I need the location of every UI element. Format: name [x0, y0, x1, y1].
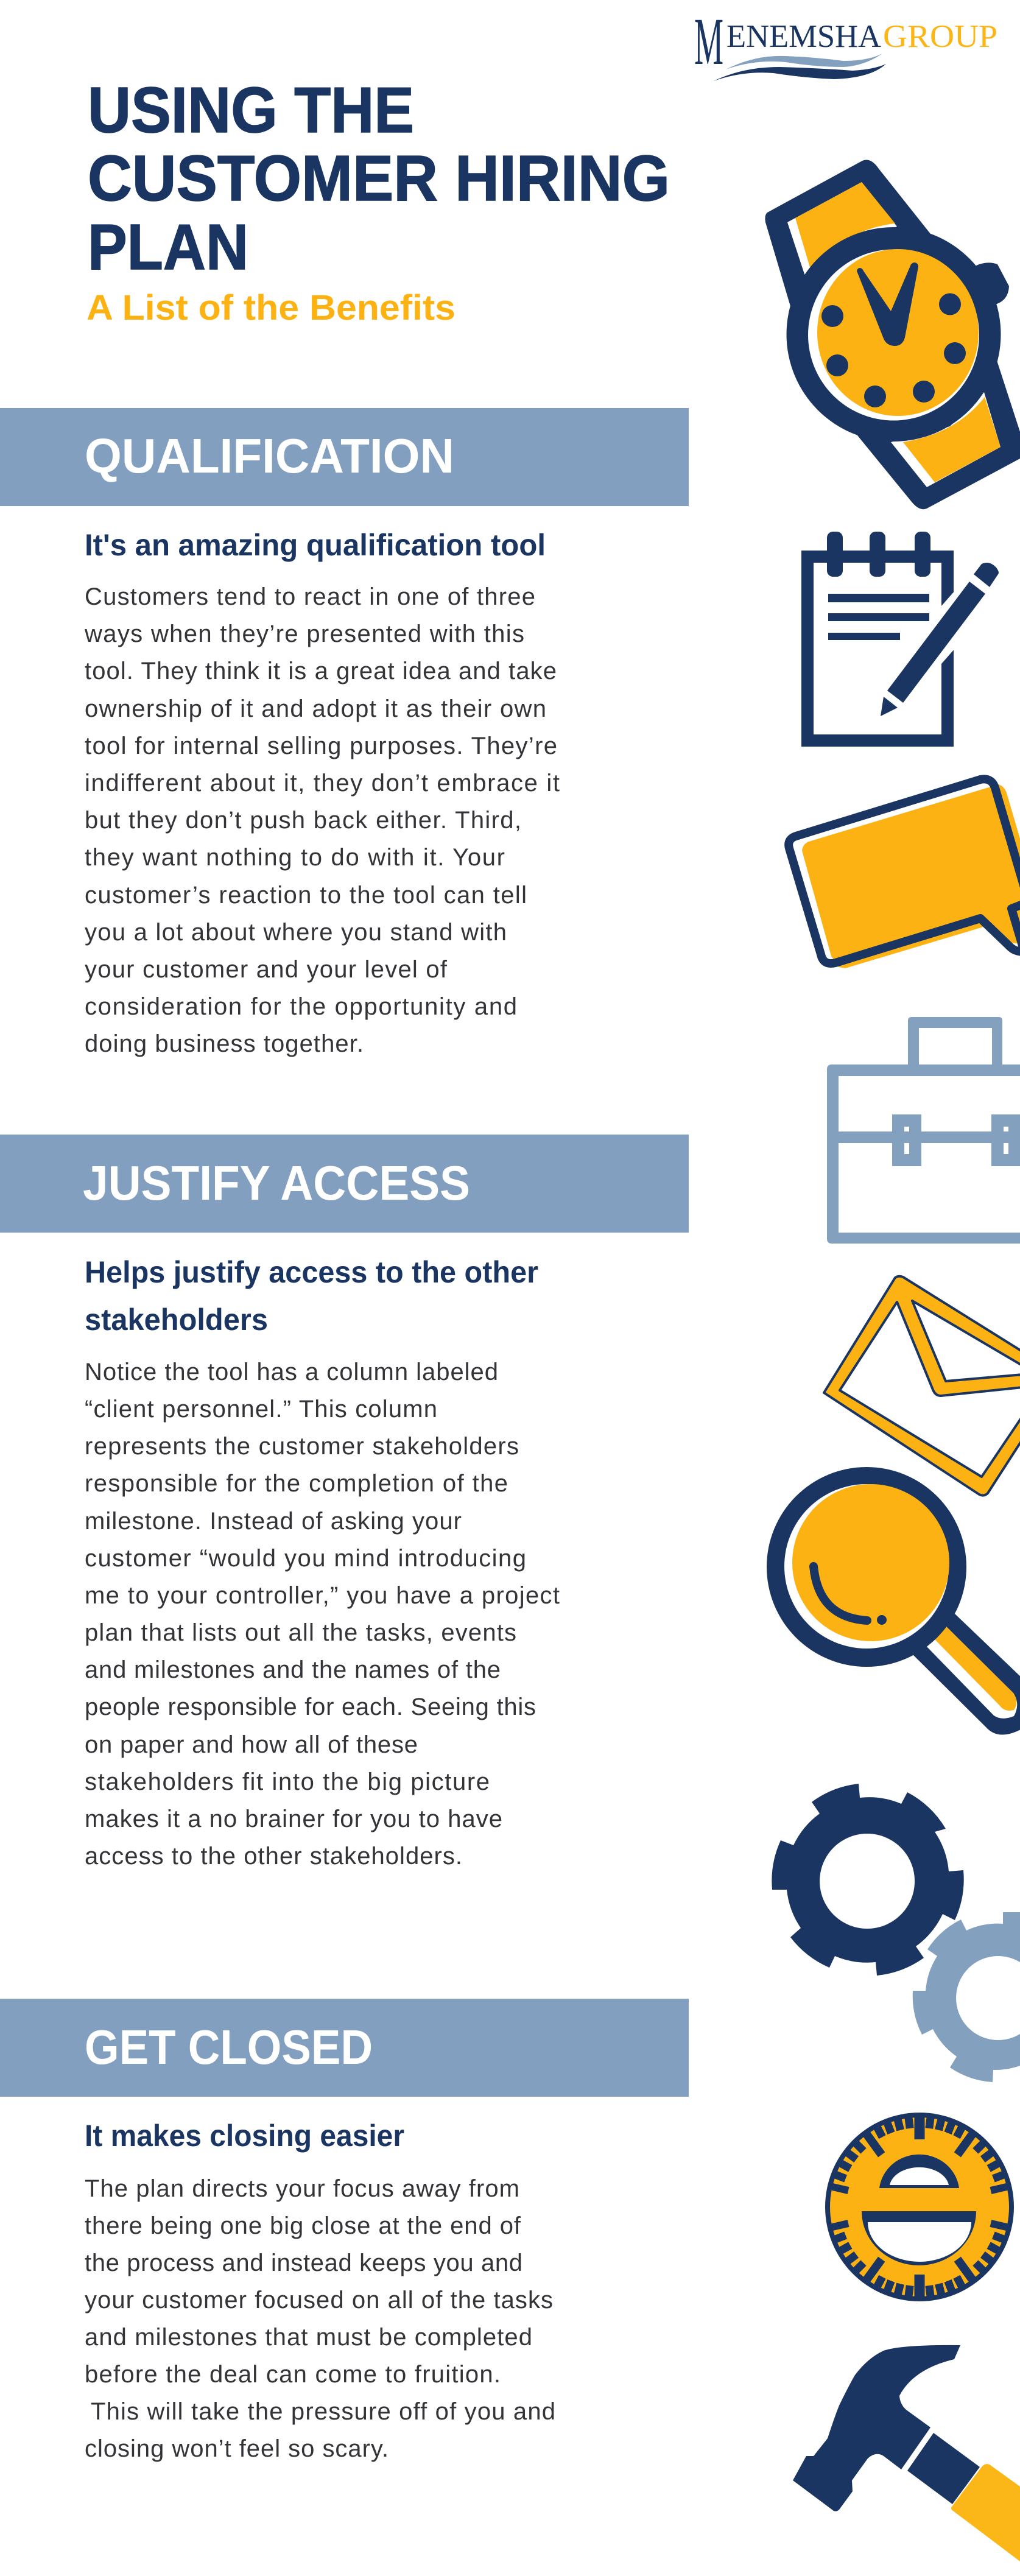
body text: justify access: [85, 1359, 560, 1870]
heading: qualification tool: It's an amazing qualification tool: [85, 528, 546, 562]
heading: justify access: stakeholders: [85, 1303, 268, 1337]
body text: justify access: and milestones and the names of the: [85, 1656, 501, 1683]
logo: Menemsha Group: ENEMSHA: [726, 19, 881, 54]
title: CUSTOMER HIRING: [88, 143, 670, 214]
body text: qualification: ownership of it and adopt it as their own: [85, 695, 546, 722]
icon: briefcase: [827, 1017, 1020, 1244]
body text: qualification: tool. They think it is a great idea and take: [85, 658, 557, 684]
logo: Menemsha Group: GROUP: [883, 19, 997, 54]
body text: get closed: The plan directs your focus away from: [85, 2175, 519, 2202]
heading: justify access: [85, 1255, 538, 1337]
body text: justify access: responsible for the completion of the: [85, 1470, 508, 1497]
panel: justify access: [0, 1135, 689, 1870]
body text: qualification: you a lot about where you stand with: [85, 919, 507, 946]
body text: qualification: consideration for the opportunity and: [85, 993, 517, 1020]
body text: justify access: plan that lists out all the tasks, events: [85, 1619, 516, 1646]
body text: get closed: [85, 2175, 555, 2462]
title: [88, 74, 670, 283]
body text: justify access: access to the other stakeholders.: [85, 1843, 462, 1870]
body text: qualification: customer’s reaction to the tool can tell: [85, 882, 527, 909]
body text: qualification: [84, 583, 560, 1057]
body text: qualification: they want nothing to do with it. Your: [85, 844, 505, 871]
body text: get closed: closing won’t feel so scary.: [85, 2435, 389, 2462]
body text: justify access: on paper and how all of these: [85, 1731, 418, 1758]
section band: justify access: JUSTIFY ACCESS: [83, 1156, 470, 1210]
body text: qualification: tool for internal selling purposes. They’re: [85, 733, 557, 759]
icon: gears: [772, 1784, 1020, 2082]
icon: speech bubble: [789, 779, 1020, 968]
body text: justify access: milestone. Instead of asking your: [85, 1508, 462, 1535]
body text: qualification: ways when they’re presented with this: [84, 621, 524, 647]
body text: get closed: This will take the pressure off of you and: [91, 2398, 555, 2425]
body text: get closed: and milestones that must be completed: [85, 2324, 532, 2351]
title: USING THE: [88, 74, 414, 146]
body text: justify access: people responsible for each. Seeing this: [85, 1694, 536, 1720]
body text: get closed: the process and instead keeps you and: [85, 2250, 522, 2276]
icon: wristwatch: [765, 160, 1020, 509]
body text: qualification: but they don’t push back either. Third,: [85, 807, 521, 834]
title: PLAN: [88, 211, 248, 283]
icon: notepad and pencil: [801, 532, 999, 747]
subtitle: A List of the Benefits: [86, 288, 455, 328]
body text: justify access: customer “would you mind introducing: [85, 1545, 526, 1572]
heading: justify access: Helps justify access to the other: [85, 1255, 538, 1289]
body text: justify access: “client personnel.” This column: [85, 1396, 437, 1423]
body text: justify access: makes it a no brainer for you to have: [85, 1806, 502, 1832]
body text: justify access: Notice the tool has a column labeled: [85, 1359, 498, 1385]
section band: get closed: [0, 1999, 689, 2097]
section band: qualification: [0, 408, 689, 506]
body text: qualification: doing business together.: [85, 1030, 364, 1057]
section band: justify access: [0, 1135, 689, 1233]
body text: justify access: stakeholders fit into the big picture: [85, 1768, 490, 1795]
body text: justify access: represents the customer stakeholders: [85, 1433, 519, 1460]
body text: get closed: before the deal can come to fruition.: [85, 2361, 501, 2388]
icon: hammer: [793, 2345, 1020, 2561]
body text: qualification: your customer and your level of: [85, 956, 448, 983]
body text: get closed: there being one big close at the end of: [85, 2212, 521, 2239]
icon: protractor: [825, 2113, 1014, 2301]
logo: Menemsha Group: [694, 4, 997, 81]
panel: get closed: [0, 1999, 689, 2462]
panel: qualification: [0, 408, 689, 1057]
icon: envelope: [824, 1276, 1020, 1496]
heading: get closed: It makes closing easier: [85, 2119, 404, 2153]
icon: magnifying glass: [767, 1467, 1020, 1735]
section band: qualification: QUALIFICATION: [85, 429, 454, 483]
body text: get closed: your customer focused on all of the tasks: [85, 2287, 553, 2314]
logo: Menemsha Group: M: [694, 4, 723, 79]
body text: justify access: me to your controller,” you have a project: [85, 1582, 560, 1609]
body text: qualification: indifferent about it, they don’t embrace it: [85, 770, 560, 797]
body text: qualification: Customers tend to react in one of three: [85, 583, 535, 610]
section band: get closed: GET CLOSED: [85, 2020, 373, 2074]
